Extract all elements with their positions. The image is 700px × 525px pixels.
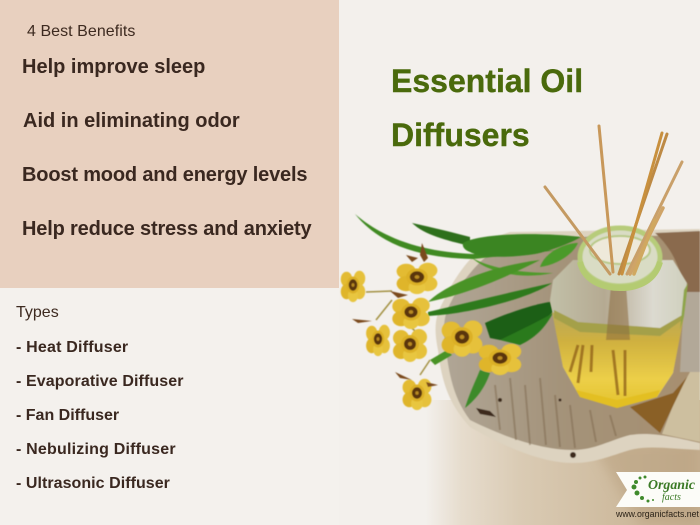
tray <box>436 229 700 463</box>
bottle <box>550 228 688 408</box>
title <box>391 63 583 153</box>
benefit: sleep: Help improve sleep <box>22 56 205 78</box>
panel: benefits <box>0 0 339 288</box>
logo ribbon <box>616 472 700 507</box>
logo ribbon: facts <box>662 492 681 503</box>
type: fan: - Fan Diffuser <box>16 407 119 424</box>
bottle neck rim front <box>580 262 660 288</box>
title: Essential Oil <box>391 63 583 99</box>
title: Diffusers <box>391 117 530 153</box>
benefit: odor: Aid in eliminating odor <box>23 110 240 132</box>
flowers <box>341 243 521 410</box>
types heading: Types <box>16 304 59 321</box>
type: ultrasonic: - Ultrasonic Diffuser <box>16 475 170 492</box>
type: evaporative: - Evaporative Diffuser <box>16 373 184 390</box>
reeds <box>545 126 682 274</box>
panel: types <box>0 288 339 525</box>
type: heat: - Heat Diffuser <box>16 339 128 356</box>
benefit: stress: Help reduce stress and anxiety <box>22 218 311 240</box>
leaves <box>355 214 581 408</box>
background photo panel <box>340 124 700 525</box>
benefit: mood: Boost mood and energy levels <box>22 164 307 186</box>
website url: www.organicfacts.net <box>615 509 699 519</box>
logo ribbon: Organic <box>648 478 696 493</box>
type: nebulizing: - Nebulizing Diffuser <box>16 441 176 458</box>
table surface shadow <box>339 400 700 525</box>
benefits heading: 4 Best Benefits <box>27 23 135 40</box>
